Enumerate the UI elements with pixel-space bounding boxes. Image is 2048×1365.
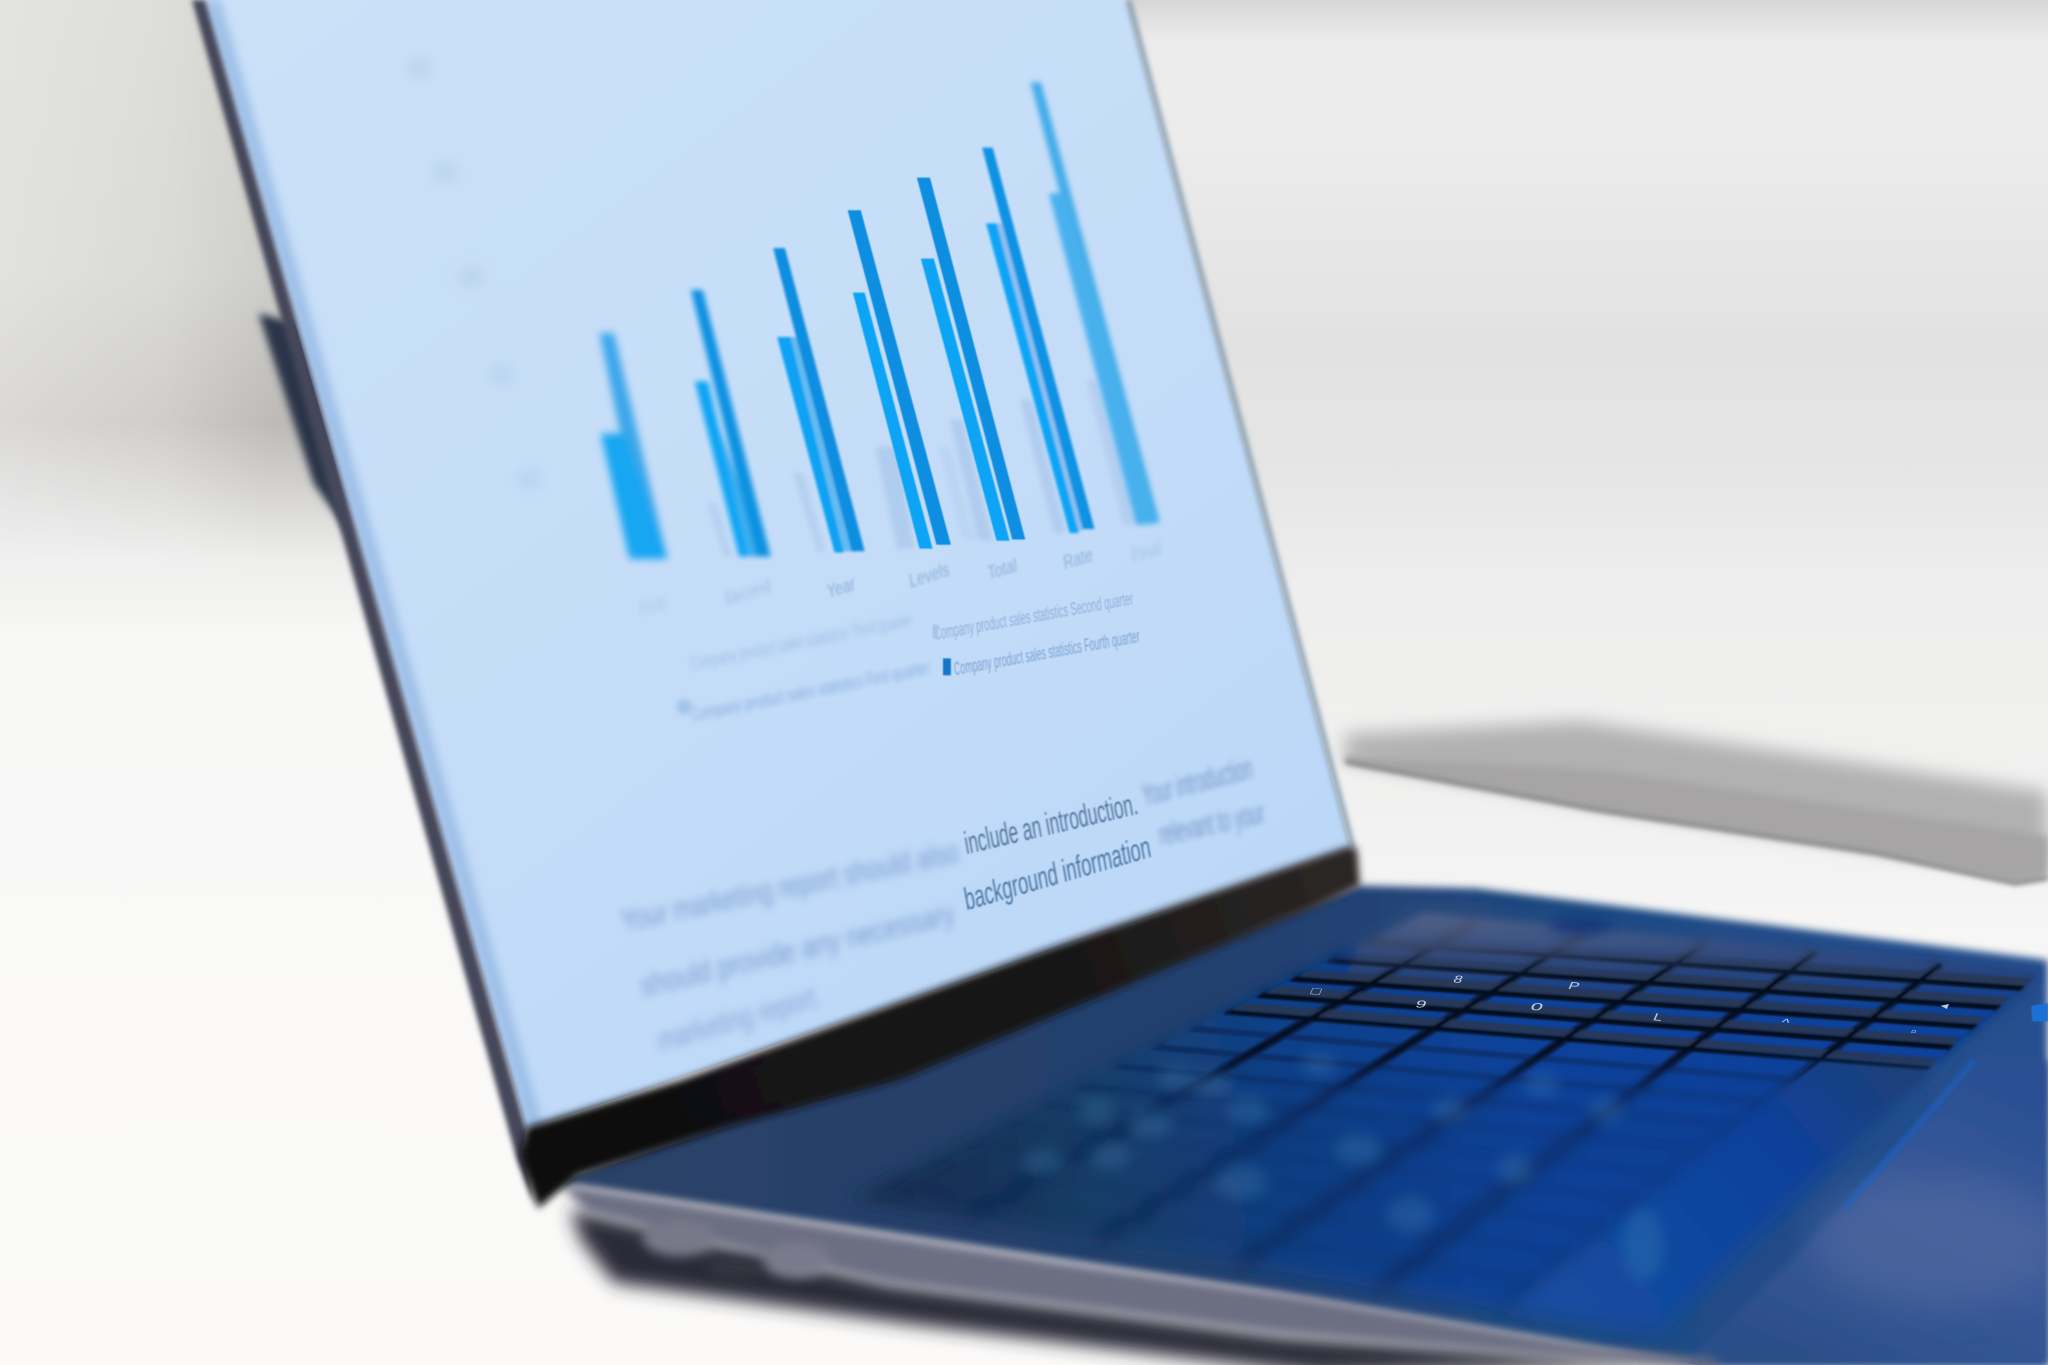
report paragraph text: background information bbox=[961, 828, 1153, 917]
key caps legends: 9 bbox=[1413, 999, 1429, 1011]
key legend blobs bbox=[1024, 1053, 1664, 1281]
report paragraph text: include an introduction. bbox=[961, 785, 1140, 861]
faint y axis ticks bbox=[408, 59, 541, 489]
chart axis labels: Total bbox=[986, 553, 1018, 584]
report paragraph text: marketing report. bbox=[655, 978, 824, 1058]
trackpad bbox=[1685, 1055, 2048, 1365]
group 4 bbox=[848, 210, 951, 549]
key caps legends: 0 bbox=[1528, 1001, 1545, 1013]
grey tablet blurred in the background bbox=[1345, 721, 2048, 883]
chart axis labels: Levels bbox=[908, 557, 951, 592]
chart axis labels: Final bbox=[1130, 536, 1163, 568]
laptop front edge: dark underside bbox=[569, 1208, 1698, 1365]
laptop screen panel bbox=[202, 0, 1351, 1130]
group 5 bbox=[917, 178, 1025, 541]
chart axis labels: Year bbox=[825, 571, 857, 603]
chart legend: Company product sales statistics Second quarter bbox=[933, 588, 1134, 644]
chart legend bbox=[677, 588, 1141, 725]
laptop screen panel: relevant to your bbox=[1156, 794, 1267, 852]
laptop front edge: grey metal band with ports bbox=[559, 1183, 1724, 1365]
chart axis labels: Second bbox=[722, 573, 772, 611]
key caps legends: L bbox=[1651, 1011, 1665, 1023]
group 1 bbox=[600, 333, 667, 559]
chart legend: Company product sales statistics Third quarter bbox=[689, 609, 913, 674]
key caps legends: 8 bbox=[1451, 973, 1465, 985]
report paragraph text: Your introduction bbox=[1139, 749, 1255, 813]
group 3 bbox=[773, 248, 865, 553]
dark object behind the laptop lid bbox=[259, 313, 350, 536]
key caps legends: □ bbox=[1309, 985, 1323, 997]
chart axis labels: Rate bbox=[1062, 542, 1094, 574]
screen bottom bezel bbox=[520, 846, 1360, 1208]
key caps legends: ▫ bbox=[1909, 1026, 1919, 1037]
key caps legends: P bbox=[1566, 980, 1582, 992]
laptop screen panel: Company product sales statistics Fourth quarter bbox=[953, 625, 1141, 679]
screen left edge bezel bbox=[192, 0, 533, 1202]
key caps legends bbox=[1309, 973, 1951, 1037]
pale background bars bbox=[707, 380, 1136, 556]
keyboard bbox=[856, 908, 2042, 1335]
key caps legends: ◂ bbox=[1939, 999, 1951, 1012]
laptop deck bbox=[555, 886, 2048, 1365]
back row dark reflection bbox=[1549, 917, 1612, 935]
chart legend: Company product sales statistics First quarter bbox=[690, 657, 930, 725]
blue logo tag at deck edge bbox=[2031, 1003, 2048, 1021]
group 7 bbox=[1031, 82, 1160, 525]
screen right edge bbox=[1128, 0, 1353, 849]
chart axis labels bbox=[637, 536, 1163, 621]
report paragraph text: Your marketing report should also bbox=[618, 833, 961, 938]
group 2 bbox=[691, 290, 771, 556]
screen left edge fringe bbox=[213, 0, 537, 1130]
group 6 bbox=[982, 148, 1095, 533]
report paragraph text bbox=[618, 749, 1267, 1058]
bar chart: seven paired blue bars bbox=[600, 82, 1160, 559]
chart axis labels: First bbox=[637, 590, 667, 621]
key caps legends: ^ bbox=[1779, 1017, 1792, 1028]
report paragraph text: should provide any necessary bbox=[638, 895, 957, 1003]
